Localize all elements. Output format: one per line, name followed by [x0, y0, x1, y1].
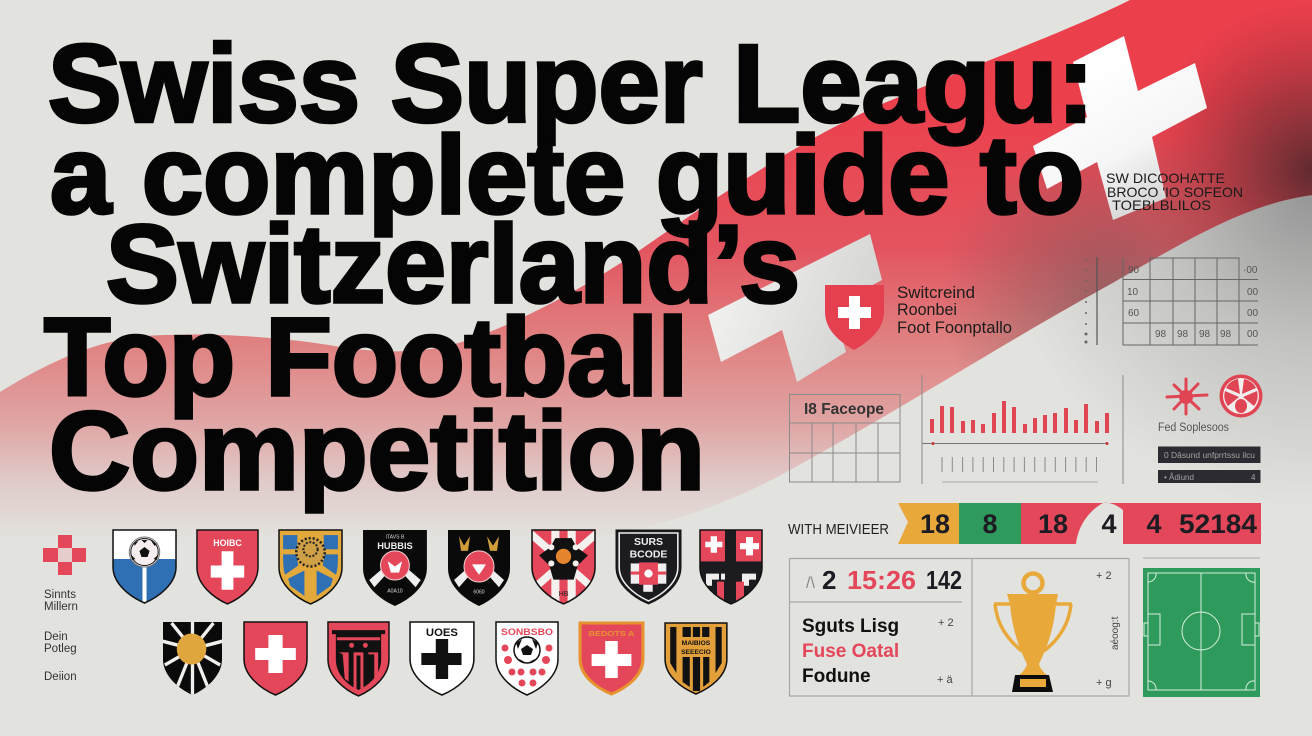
crest: blue football [112, 529, 177, 605]
crest: red crosses black bars [699, 529, 763, 605]
crest: orange border red cross [580, 623, 643, 694]
table chart top right: 60 [1128, 308, 1140, 319]
crest: black sun rays [162, 621, 223, 696]
legend labels: Dein [44, 631, 68, 643]
colored score strip: 18 [1038, 509, 1068, 539]
legend labels: Potleg [44, 643, 77, 655]
crest: gold black stripes: MAIBIOS [682, 640, 711, 647]
table chart top right: 10 [1127, 287, 1139, 298]
crest: black red heart: HUBBIS [377, 541, 413, 551]
score panel: Sguts Lisg [802, 616, 899, 637]
small table [790, 394, 900, 482]
top right caption: TOEBLBLILOS [1112, 197, 1211, 213]
score panel: 142 [926, 565, 962, 595]
emblem caption: Roonbei [897, 301, 957, 319]
colored score strip [898, 503, 1261, 544]
table chart top right [1084, 257, 1259, 345]
dark label bars: • Ådiund [1164, 473, 1194, 482]
table chart top right: 98 [1220, 329, 1232, 340]
legend labels: Millern [44, 601, 78, 613]
score panel: 2 [822, 565, 836, 595]
title: Switzerland’s [106, 203, 800, 326]
crest: orange border red cross: BEDOTS A [588, 629, 635, 638]
small table: I8 Faceope [804, 401, 884, 418]
swiss red ribbon [0, 0, 1312, 545]
emblem caption: Switcreind [897, 284, 975, 302]
title: Swiss Super Leagu: [48, 22, 1094, 146]
legend labels [44, 589, 78, 683]
crest: red cross [244, 622, 307, 695]
score panel: + 2 [938, 617, 954, 629]
swiss shield emblem [825, 285, 884, 350]
legend labels: Deiion [44, 671, 77, 683]
colored score strip: 18 [920, 509, 950, 539]
top right caption: SW DICOOHATTE [1106, 170, 1225, 186]
crest: gold black stripes: SEEECIO [681, 649, 711, 656]
crest: black red heart: ITAVS B [385, 534, 405, 540]
emblem caption: Foot Foonptallo [897, 319, 1012, 337]
crest: white black cross [410, 622, 474, 695]
crest: red white cross [197, 530, 258, 604]
crest: red white black rosette: HB [559, 590, 569, 598]
dark label bars [1158, 446, 1260, 483]
crest: red white black rosette [531, 529, 596, 605]
bar chart [922, 375, 1123, 484]
score panel: + 2 [1096, 570, 1112, 582]
table chart top right: 98 [1177, 329, 1189, 340]
football pitch [1143, 558, 1260, 697]
large white cross middle [708, 234, 882, 382]
table chart top right: ·00 [1243, 265, 1258, 276]
colored score strip: 4 [1101, 509, 1117, 539]
crest: blue and gold [278, 529, 343, 605]
crest: red white cross: HOIBC [213, 538, 242, 548]
trophy [994, 574, 1072, 692]
score panel: + ä [937, 674, 953, 686]
table chart top right: 90 [1128, 265, 1140, 276]
colored score strip: 8 [982, 509, 998, 539]
score panel [790, 558, 1129, 696]
crest: white ball red dots: SONBSBO [501, 627, 553, 637]
score panel: aéoog:t [1110, 616, 1121, 650]
score panel: /\ [806, 575, 815, 592]
crest: black white border: SURS [634, 537, 663, 548]
icon: red burst [1167, 379, 1207, 414]
score panel: 15:26 [847, 565, 916, 595]
crest: red and black totem [328, 622, 389, 696]
crest: black gold laurel [448, 530, 510, 606]
top right caption: BROCO 'IO SOFEON [1107, 184, 1243, 200]
title: a complete guide to [50, 114, 1084, 237]
crest: black white border [616, 530, 681, 604]
crest row 1 [112, 529, 763, 606]
icon caption: Fed Soplesoos [1158, 422, 1229, 434]
legend labels: Sinnts [44, 589, 76, 601]
title [44, 22, 1094, 513]
dark label bars: 0 Dâsund unfprrtssu ilcu [1164, 451, 1255, 460]
strip label: WITH MEIVIEER [788, 521, 889, 538]
crest: gold black stripes [665, 623, 727, 694]
colored score strip: 4 [1146, 509, 1162, 539]
table chart top right: 00 [1247, 287, 1259, 298]
title: Competition [49, 390, 705, 513]
crest: white black cross: UOES [426, 627, 458, 639]
table chart top right: 00 [1247, 329, 1259, 340]
emblem caption [897, 284, 1012, 337]
dark label bars: 4 [1251, 473, 1256, 482]
table chart top right: 00 [1247, 308, 1259, 319]
crest: black red heart: A0A10 [387, 588, 403, 594]
crest: black red heart [363, 530, 427, 606]
table chart top right: 98 [1155, 329, 1167, 340]
title: Top Football [44, 296, 688, 419]
large white cross upper right [1033, 36, 1207, 220]
crest: black gold laurel: 6060 [473, 589, 485, 596]
score panel: Fuse Oatal [802, 641, 899, 662]
table chart top right: 98 [1199, 329, 1211, 340]
top right caption [1106, 170, 1243, 213]
score panel: + g [1096, 677, 1112, 689]
score panel: Fodune [802, 666, 871, 687]
crest: white ball red dots [496, 622, 558, 695]
crest: black white border: BCODE [630, 549, 668, 560]
colored score strip: 52184 [1179, 509, 1257, 539]
icon: red checker cross [43, 535, 86, 575]
icon: segmented wheel [1220, 374, 1262, 418]
crest row 2 [162, 621, 727, 696]
